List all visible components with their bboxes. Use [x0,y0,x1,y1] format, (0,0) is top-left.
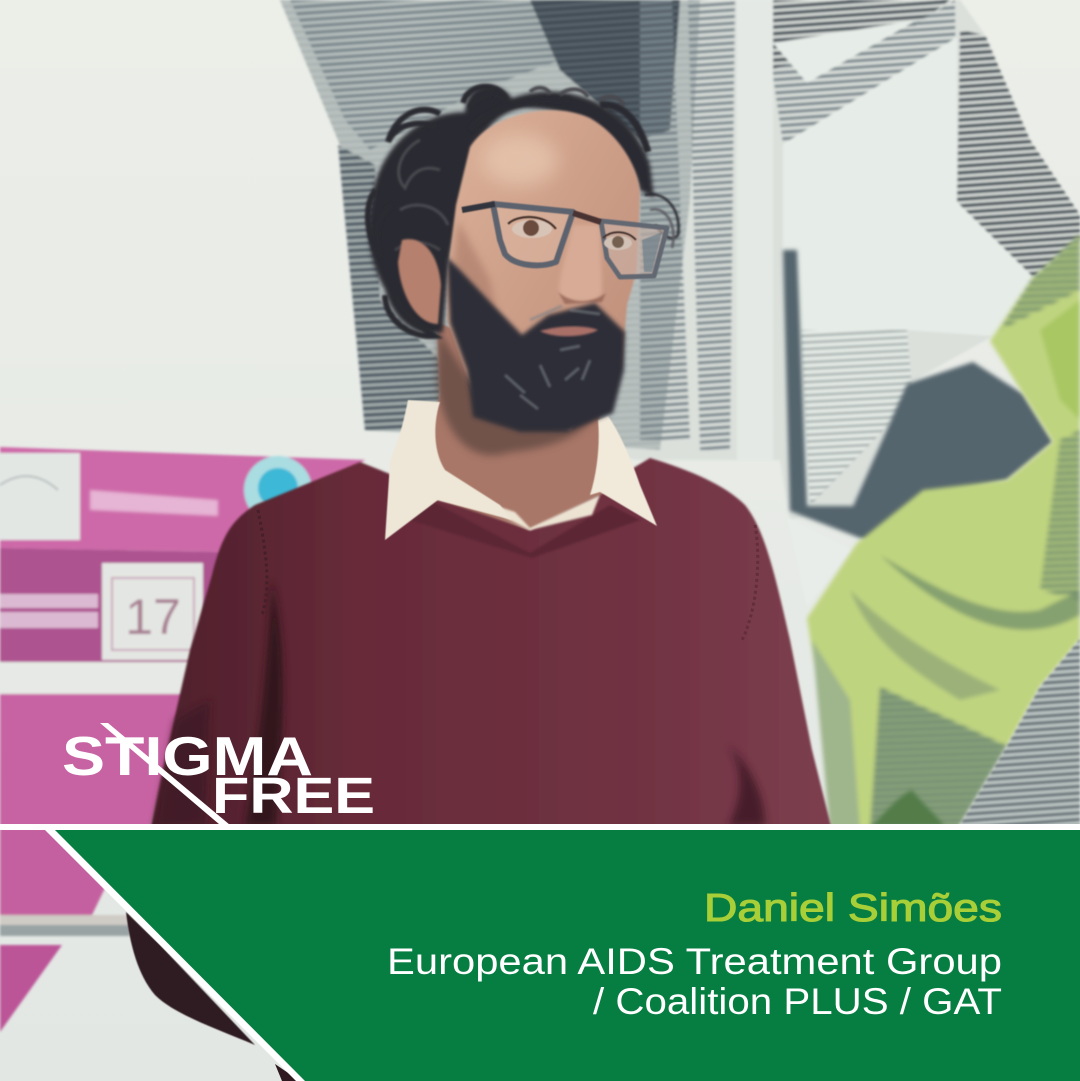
right sleeve seam [742,525,758,640]
lower arm fragment [126,912,255,1045]
foreground plant [872,790,945,826]
sweater [150,458,832,830]
mural slate shape [783,250,1053,543]
poster white badge [0,453,80,540]
mural bottom-right stripes [957,639,1080,830]
hair back mass [368,86,654,334]
Stigma Free logo [62,723,375,830]
hair curls [368,87,679,336]
cheek shadow [450,220,500,330]
pink poster board [0,447,365,1032]
poster cyan logo [244,456,312,524]
lower arm fragment bottom [275,1064,300,1081]
right lens [601,221,667,277]
white patch beside sleeve [787,517,850,607]
striped mural [280,0,1080,520]
shirt collar right [590,416,657,526]
neck [431,322,610,530]
sweater V neckline rib [410,495,640,558]
shirt collar left [385,400,512,540]
number plate 17 [102,563,203,660]
affiliation line 1: European AIDS Treatment Group [387,941,1002,982]
left lens [493,204,573,265]
poster blurred caption [90,490,218,516]
lens glare [642,232,662,272]
mural lime green shape [807,234,1080,830]
sweater fold shadows [155,580,765,826]
poster blurred caption lower [0,594,98,628]
white divider line [0,824,1080,830]
speaker name: Daniel Simões [704,887,1002,930]
green caption panel [55,830,1080,1081]
face [447,110,640,430]
logo slash [100,723,236,830]
forehead highlight [482,134,558,186]
logo word STIGMA: STIGMA [62,725,313,787]
affiliation line 2: / Coalition PLUS / GAT [593,981,1002,1022]
ear [398,239,441,324]
lips [540,326,598,336]
number plate 17: 17 [125,589,181,645]
left eye [512,220,552,238]
person [126,86,832,1081]
logo word FREE: FREE [212,767,375,824]
right eye [604,236,632,250]
glasses [462,204,667,277]
shirt placket [430,485,600,530]
nose [559,225,602,302]
beard [447,257,625,432]
beard grey highlights [505,306,600,409]
neck stubble [437,330,598,455]
white diagonal line [45,830,306,1081]
temple arm [462,204,495,210]
nose shadow [558,292,606,304]
sweater sleeve seam [258,510,267,615]
bridge [573,213,601,222]
